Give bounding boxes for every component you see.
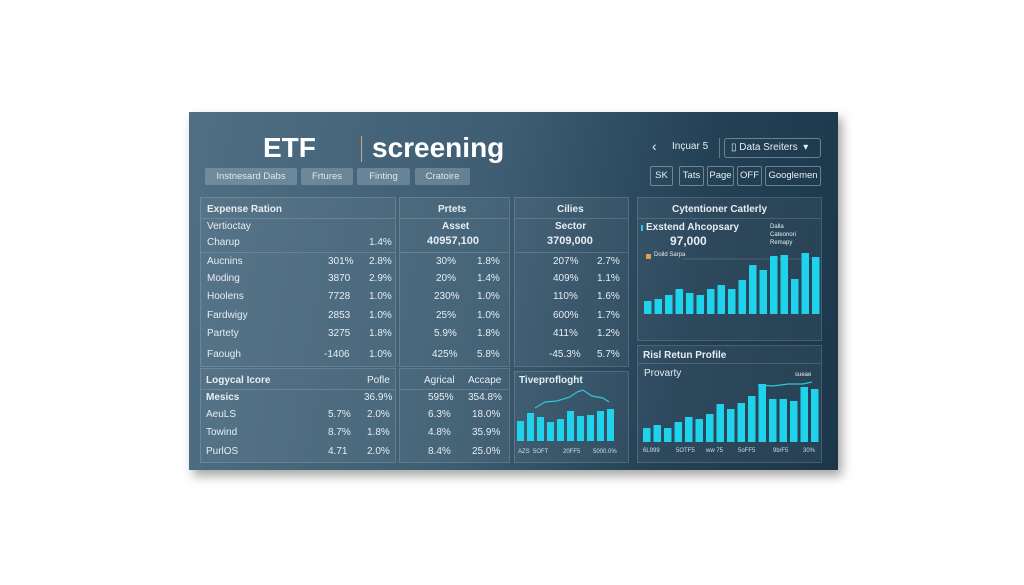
panel: prtets table: 1.0% xyxy=(477,291,500,302)
tabs: Frtures xyxy=(312,171,342,182)
dashboard panel xyxy=(189,112,838,470)
panel: prtets table: 5.8% xyxy=(477,349,500,360)
panel: cilies table: 5.7% xyxy=(597,349,620,360)
panel: expense ratio table: Faough xyxy=(207,349,241,360)
panel: expense ratio table: 1.4% xyxy=(369,237,392,248)
panel: logycal icore table: 2.0% xyxy=(367,446,390,457)
panel: cilies table: Sector xyxy=(555,221,586,232)
panel: bar chart cytentioner: Cytentioner Catlerly xyxy=(672,204,767,215)
panel: logycal icore table: AeuLS xyxy=(206,409,236,420)
nav controls: ‹ xyxy=(652,138,657,154)
panel: bar chart cytentioner xyxy=(637,197,822,341)
panel: prtets table: 1.0% xyxy=(477,310,500,321)
subtitle: screening xyxy=(372,132,504,163)
panel: expense ratio table xyxy=(200,197,396,367)
panel: prtets table xyxy=(399,197,510,367)
title: ETF xyxy=(263,132,316,163)
panel: expense ratio table: -1406 xyxy=(324,349,350,360)
buttons: Googlemen xyxy=(768,170,818,181)
panel: expense ratio table: 301% xyxy=(328,256,354,267)
panel: cilies table: 2.7% xyxy=(597,256,620,267)
panel: tiveprofloght chart: 5000.0% xyxy=(593,449,617,455)
panel: logycal icore table: Pofle xyxy=(367,375,390,386)
panel: cilies table: 3709,000 xyxy=(547,235,593,247)
panel: logycal icore table: Logycal Icore xyxy=(206,375,270,386)
panel: risk return profile: sueae xyxy=(795,372,811,378)
panel: prtets table: 1.8% xyxy=(477,328,500,339)
panel: risk return profile xyxy=(637,345,822,463)
panel: logycal icore table: 8.7% xyxy=(328,427,351,438)
panel: tiveprofloght chart: 20FF5 xyxy=(563,449,581,455)
panel: logycal icore table: 4.71 xyxy=(328,446,347,457)
panel: prtets table: 425% xyxy=(432,349,458,360)
panel: expense ratio table: 3870 xyxy=(328,273,350,284)
panel: expense ratio table: Expense Ration xyxy=(207,204,282,215)
panel: expense ratio table: 2853 xyxy=(328,310,350,321)
panel: logycal icore table: PurlOS xyxy=(206,446,238,457)
panel: tiveprofloght chart: Tiveprofloght xyxy=(519,375,583,386)
panel: prtets table: 1.8% xyxy=(477,256,500,267)
panel: cilies table: 1.6% xyxy=(597,291,620,302)
panel: expense ratio table: 1.0% xyxy=(369,291,392,302)
panel: bar chart cytentioner: 97,000 xyxy=(670,234,707,248)
buttons: Page xyxy=(709,170,732,181)
panel: expense ratio table: 1.0% xyxy=(369,349,392,360)
panel: logycal icore table: 5.7% xyxy=(328,409,351,420)
buttons: OFF xyxy=(740,170,759,181)
panel: logycal icore table xyxy=(200,368,396,463)
panel: expense ratio table: Fardwigy xyxy=(207,310,248,321)
panel: logycal icore table: 2.0% xyxy=(367,409,390,420)
panel: agrical table: 595% xyxy=(428,392,454,403)
buttons: SK xyxy=(655,170,668,181)
panel: agrical table: 18.0% xyxy=(472,409,500,420)
panel: expense ratio table: 3275 xyxy=(328,328,350,339)
panel: expense ratio table: Vertioctay xyxy=(207,221,251,232)
panel: expense ratio table: 1.0% xyxy=(369,310,392,321)
panel: cilies table: 411% xyxy=(553,328,578,339)
panel: prtets table: 20% xyxy=(436,273,456,284)
panel: cilies table: 1.1% xyxy=(597,273,620,284)
panel: agrical table: 25.0% xyxy=(472,446,500,457)
panel: risk return profile: 5oFF5 xyxy=(738,448,756,454)
panel: logycal icore table: Mesics xyxy=(206,392,239,403)
panel: tiveprofloght chart xyxy=(514,371,629,463)
panel: prtets table: 40957,100 xyxy=(427,235,479,247)
panel: risk return profile: 5OTF5 xyxy=(676,448,695,454)
panel: agrical table: 6.3% xyxy=(428,409,451,420)
panel: expense ratio table: Partety xyxy=(207,328,239,339)
buttons xyxy=(650,166,821,186)
tabs: Cratoire xyxy=(426,171,459,182)
panel: expense ratio table: Hoolens xyxy=(207,291,244,302)
panel: cilies table: 207% xyxy=(553,256,579,267)
panel: tiveprofloght chart: 5OFT xyxy=(533,449,549,455)
panel: expense ratio table: 1.8% xyxy=(369,328,392,339)
panel: bar chart cytentioner: Exstend Ahcopsary xyxy=(646,222,739,233)
panel: cilies table: -45.3% xyxy=(549,349,581,360)
nav controls: Inçuar 5 xyxy=(672,141,708,152)
panel: expense ratio table: 2.8% xyxy=(369,256,392,267)
panel: cilies table: Cilies xyxy=(557,204,584,215)
panel: prtets table: 230% xyxy=(434,291,460,302)
panel: agrical table: Accape xyxy=(468,375,501,386)
panel: risk return profile: 9b/F5 xyxy=(773,448,789,454)
panel: prtets table: Asset xyxy=(442,221,469,232)
panel: bar chart cytentioner: Dalla xyxy=(770,224,784,230)
panel: expense ratio table: Charup xyxy=(207,237,240,248)
panel: prtets table: 25% xyxy=(436,310,456,321)
panel: expense ratio table: 2.9% xyxy=(369,273,392,284)
panel: agrical table: Agrical xyxy=(424,375,455,386)
panel: prtets table: 30% xyxy=(436,256,456,267)
panel: tiveprofloght chart: AZS xyxy=(518,449,530,455)
panel: bar chart cytentioner: Remapy xyxy=(770,240,792,246)
panel: prtets table: Prtets xyxy=(438,204,466,215)
panel: expense ratio table: Moding xyxy=(207,273,240,284)
nav controls: ▯ Data Sreiters ▾ xyxy=(731,142,808,153)
panel: bar chart cytentioner: Cateonori xyxy=(770,232,796,238)
panel: risk return profile: Risl Retun Profile xyxy=(643,350,726,361)
panel: cilies table: 1.7% xyxy=(597,310,620,321)
panel: bar chart cytentioner: Doild Sarpa xyxy=(654,252,685,258)
panel: expense ratio table: 7728 xyxy=(328,291,350,302)
panel: cilies table: 1.2% xyxy=(597,328,620,339)
panel: expense ratio table: Aucnins xyxy=(207,256,243,267)
panel: risk return profile: Provarty xyxy=(644,368,681,379)
panel: cilies table xyxy=(514,197,629,367)
title divider xyxy=(361,136,362,162)
panel: logycal icore table: Towind xyxy=(206,427,237,438)
panel: cilies table: 600% xyxy=(553,310,579,321)
panel: agrical table xyxy=(399,368,510,463)
panel: agrical table: 354.8% xyxy=(468,392,502,403)
panel: prtets table: 5.9% xyxy=(434,328,457,339)
nav controls xyxy=(652,138,821,158)
panel: logycal icore table: 36.9% xyxy=(364,392,392,403)
panel: risk return profile: 6L999 xyxy=(643,448,660,454)
panel: risk return profile: ww 75 xyxy=(705,448,724,454)
tabs: Instnesard Dabs xyxy=(216,171,286,182)
panel: agrical table: 4.8% xyxy=(428,427,451,438)
panel: logycal icore table: 1.8% xyxy=(367,427,390,438)
tabs xyxy=(205,168,470,185)
tabs: Finting xyxy=(369,171,398,182)
panel: cilies table: 110% xyxy=(553,291,578,302)
panel: agrical table: 35.9% xyxy=(472,427,500,438)
panel: agrical table: 8.4% xyxy=(428,446,451,457)
panel: risk return profile: 30% xyxy=(803,448,816,454)
panel: prtets table: 1.4% xyxy=(477,273,500,284)
buttons: Tats xyxy=(683,170,700,181)
panel: cilies table: 409% xyxy=(553,273,579,284)
